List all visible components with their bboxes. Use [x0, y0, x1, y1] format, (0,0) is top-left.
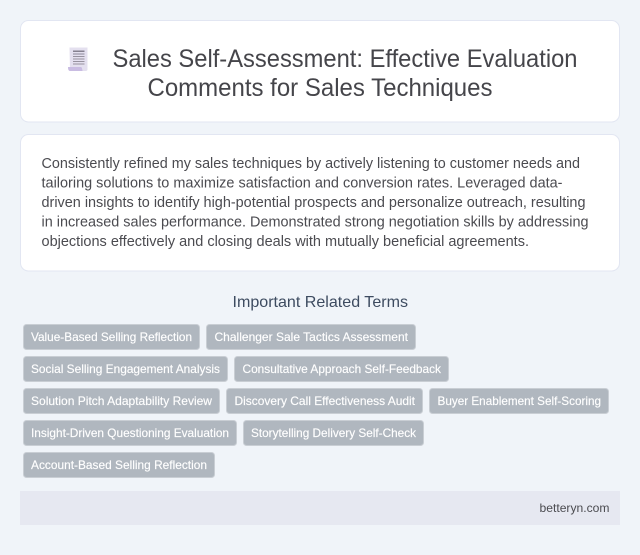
- tag: Consultative Approach Self-Feedback: [242, 362, 442, 376]
- panel: title header: [20, 20, 620, 122]
- footer: [20, 491, 620, 525]
- paragraph text: driven insights to identify high-potential prospects and personalize outreach, resulting: [42, 195, 586, 211]
- tag: Insight-Driven Questioning Evaluation: [31, 426, 229, 440]
- title: Sales Self-Assessment: Effective Evaluation: [112, 45, 578, 73]
- tag: Account-Based Selling Reflection: [31, 458, 207, 472]
- tag: Discovery Call Effectiveness Audit: [234, 394, 416, 408]
- footer source text: betteryn.com: [540, 501, 610, 515]
- heading: important related terms: Important Related Terms: [232, 294, 408, 311]
- tag: Storytelling Delivery Self-Check: [251, 426, 417, 440]
- panel: term tags: [24, 324, 608, 478]
- paragraph text: objections effectively and closing deals with mutually beneficial agreements.: [42, 234, 529, 250]
- paragraph text: in increased sales performance. Demonstrated strong negotiation skills by addressing: [42, 214, 588, 230]
- paragraph text: [42, 156, 588, 250]
- tag: Value-Based Selling Reflection: [31, 330, 192, 344]
- tag: Buyer Enablement Self-Scoring: [438, 394, 601, 408]
- icon: document receipt: [68, 48, 88, 71]
- tag: Challenger Sale Tactics Assessment: [214, 330, 409, 344]
- paragraph text: tailoring solutions to maximize satisfaction and conversion rates. Leveraged data-: [42, 176, 563, 192]
- title: Comments for Sales Techniques: [148, 74, 492, 102]
- tag: Social Selling Engagement Analysis: [31, 362, 220, 376]
- title: [112, 45, 578, 102]
- paragraph text: Consistently refined my sales techniques by actively listening to customer needs and: [42, 156, 580, 172]
- panel: self-assessment paragraph: [20, 134, 620, 271]
- tag: Solution Pitch Adaptability Review: [31, 394, 212, 408]
